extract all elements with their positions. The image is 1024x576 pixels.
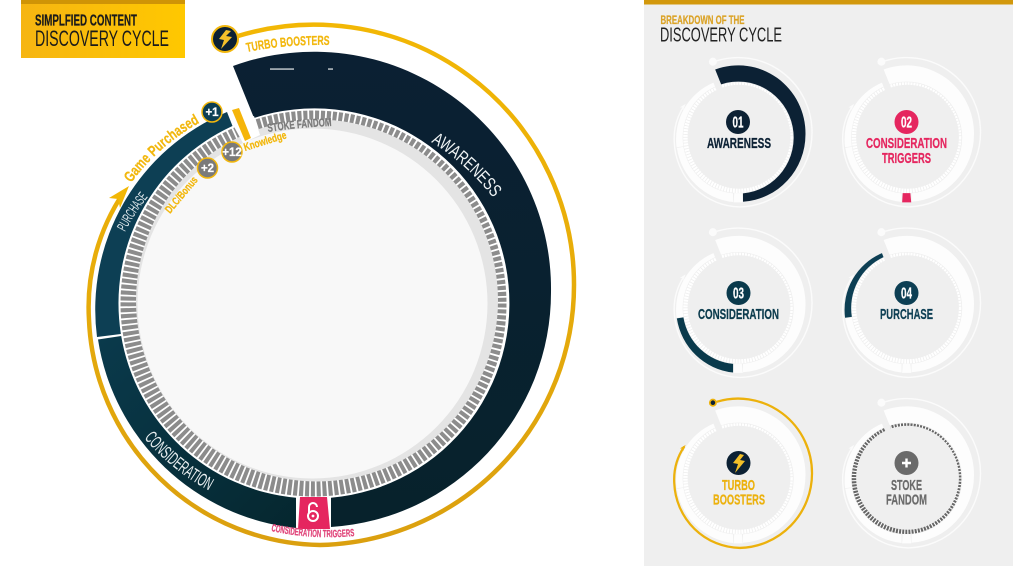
label: game purchased: Game Purchased — [124, 114, 200, 182]
badge: 02 — [894, 110, 918, 134]
badge: 01 — [726, 110, 750, 134]
label: consideration triggers — [866, 135, 947, 167]
heading: simplified content: SIMPLFIED CONTENT — [35, 13, 137, 30]
badge: 03 — [726, 281, 750, 305]
badge: 04: 04 — [901, 286, 912, 302]
label: stoke fandom: STOKE FANDOM — [268, 118, 332, 132]
heading: discovery cycle: DISCOVERY CYCLE — [660, 25, 782, 47]
label: purchase: PURCHASE — [880, 306, 933, 323]
segment: purchase — [95, 112, 233, 337]
arrow: outer line head — [109, 186, 129, 208]
card: turbo boosters — [674, 399, 812, 548]
icon: turbo lightning badge — [212, 26, 238, 52]
card: stoke fandom — [843, 399, 981, 548]
icon: lightning badge — [726, 451, 750, 475]
badge: plus one: +1 — [205, 107, 219, 119]
label: consideration triggers: CONSIDERATION TRIGGERS — [272, 524, 354, 538]
label: turbo boosters: BOOSTERS — [713, 492, 765, 508]
panel: simplified content header — [21, 0, 185, 58]
label: stoke fandom: FANDOM — [886, 492, 927, 508]
panel: breakdown of the discovery cycle — [644, 0, 1013, 566]
label: turbo boosters: TURBO — [722, 477, 755, 494]
card: 03 consideration — [674, 228, 812, 377]
label: consideration triggers: TRIGGERS — [882, 150, 931, 167]
badge: 01: 01 — [732, 114, 744, 132]
icon: plus badge — [894, 451, 918, 475]
label: consideration triggers: CONSIDERATION — [866, 135, 947, 152]
label: knowledge: Knowledge — [242, 130, 288, 154]
heading: breakdown of the: BREAKDOWN OF THE — [660, 13, 744, 27]
label: turbo boosters — [713, 477, 765, 508]
segment: awareness — [233, 52, 551, 527]
label: consideration: CONSIDERATION — [698, 306, 779, 323]
label: stoke fandom: STOKE — [891, 477, 922, 494]
disc: inner centre — [138, 128, 488, 478]
badge: 03: 03 — [733, 286, 744, 302]
label: stoke fandom — [886, 477, 927, 508]
label: awareness: AWARENESS — [431, 134, 502, 196]
card: 02 consideration triggers — [843, 58, 981, 207]
badge: 04 — [894, 281, 918, 305]
ring: stoke fandom ticks — [130, 120, 498, 488]
heading: discovery cycle: DISCOVERY CYCLE — [35, 26, 169, 51]
icon: open padlock — [308, 503, 318, 521]
segment: consideration — [98, 336, 296, 528]
label: consideration: CONSIDERATION — [146, 432, 214, 490]
label: dlc bonus: DLC/Bonus — [163, 175, 201, 216]
label: turbo boosters: TURBO BOOSTERS — [245, 36, 330, 52]
badge: plus one — [202, 102, 222, 122]
badge: plus twelve: +12 — [222, 147, 242, 159]
segment: consideration triggers — [298, 497, 330, 529]
badge: plus two: +2 — [201, 163, 214, 175]
card: 04 purchase — [843, 228, 981, 377]
badge: plus twelve — [222, 142, 242, 162]
badge: 02: 02 — [901, 114, 912, 132]
label: purchase: PURCHASE — [116, 191, 148, 232]
marker: knowledge bar — [232, 108, 251, 141]
card: 01 awareness — [674, 58, 812, 207]
ring: stoke fandom band — [136, 120, 498, 482]
badge: plus two — [198, 158, 218, 178]
chart: main discovery cycle — [86, 22, 576, 548]
label: awareness: AWARENESS — [707, 135, 771, 152]
arc: turbo boosters outer line — [89, 25, 574, 545]
